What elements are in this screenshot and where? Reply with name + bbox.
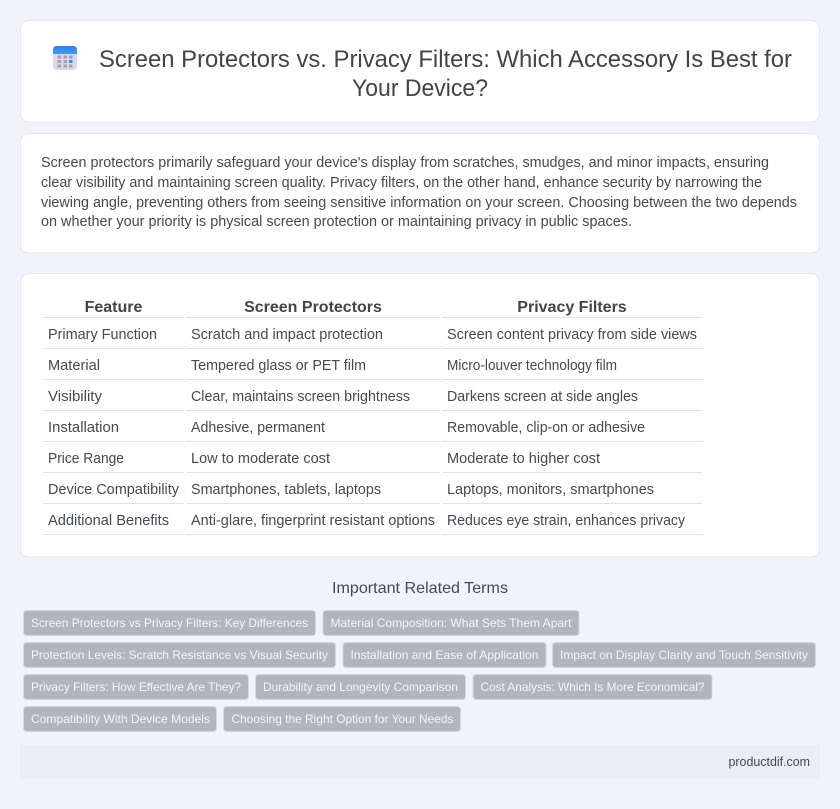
table rows: Laptops, monitors, smartphones xyxy=(447,482,654,498)
comparison table panel xyxy=(20,274,820,557)
summary text xyxy=(41,155,797,230)
summary text: Screen protectors primarily safeguard your device's display from scratches, smudges, and minor impacts, ensuring xyxy=(41,155,769,171)
table rows: Price Range xyxy=(48,451,124,467)
related term tags: Cost Analysis: Which Is More Economical? xyxy=(480,680,705,694)
related term tags: Impact on Display Clarity and Touch Sensitivity xyxy=(560,648,808,662)
table header: Privacy Filters xyxy=(517,299,627,316)
table rows: Visibility xyxy=(48,389,103,405)
footer bar xyxy=(20,745,820,779)
table rows: Scratch and impact protection xyxy=(191,327,383,343)
table rows xyxy=(48,327,697,529)
table header xyxy=(85,299,627,316)
summary text: clear visibility and maintaining screen quality. Privacy filters, on the other hand, enhance security by narrowing the xyxy=(41,175,762,191)
header panel xyxy=(20,20,820,122)
table rows: Moderate to higher cost xyxy=(447,451,600,467)
table rows: Adhesive, permanent xyxy=(191,420,325,436)
related term tags: Compatibility With Device Models xyxy=(31,712,210,726)
table rows: Low to moderate cost xyxy=(191,451,330,467)
table rows: Smartphones, tablets, laptops xyxy=(191,482,381,498)
table header: Screen Protectors xyxy=(244,299,382,316)
table header: Feature xyxy=(85,299,142,316)
related term tags: Privacy Filters: How Effective Are They? xyxy=(31,680,241,694)
footer source text: productdif.com xyxy=(728,755,810,769)
related terms heading: Important Related Terms xyxy=(332,580,508,597)
table rows: Darkens screen at side angles xyxy=(447,389,638,405)
related term tags: Material Composition: What Sets Them Apart xyxy=(330,616,572,630)
table rows: Primary Function xyxy=(48,327,157,343)
table rows: Reduces eye strain, enhances privacy xyxy=(447,513,686,529)
table rows: Device Compatibility xyxy=(48,482,180,498)
related term tags: Protection Levels: Scratch Resistance vs Visual Security xyxy=(31,648,328,662)
title: Your Device? xyxy=(352,75,488,102)
title xyxy=(99,46,792,102)
related term tags: Screen Protectors vs Privacy Filters: Key Differences xyxy=(31,616,308,630)
table rows: Clear, maintains screen brightness xyxy=(191,389,410,405)
summary text: viewing angle, preventing others from seeing sensitive information on your screen. Choosing between the two depends xyxy=(41,195,797,211)
related term tags: Durability and Longevity Comparison xyxy=(263,680,458,694)
icon: calendar xyxy=(53,46,77,70)
table rows: Tempered glass or PET film xyxy=(191,358,366,374)
table rows: Anti-glare, fingerprint resistant options xyxy=(191,513,435,529)
table rows: Installation xyxy=(48,420,119,436)
related term tags: Installation and Ease of Application xyxy=(350,648,538,662)
related term tags: Choosing the Right Option for Your Needs xyxy=(232,712,454,726)
summary text: on whether your priority is physical screen protection or maintaining privacy in public spaces. xyxy=(41,214,632,230)
summary panel xyxy=(20,134,820,253)
table rows: Micro-louver technology film xyxy=(447,358,617,374)
related term tags xyxy=(24,610,816,732)
title: Screen Protectors vs. Privacy Filters: Which Accessory Is Best for xyxy=(99,46,792,73)
table rows: Screen content privacy from side views xyxy=(447,327,697,343)
table rows: Additional Benefits xyxy=(48,513,169,529)
table rows: Material xyxy=(48,358,100,374)
table rows: Removable, clip-on or adhesive xyxy=(447,420,645,436)
